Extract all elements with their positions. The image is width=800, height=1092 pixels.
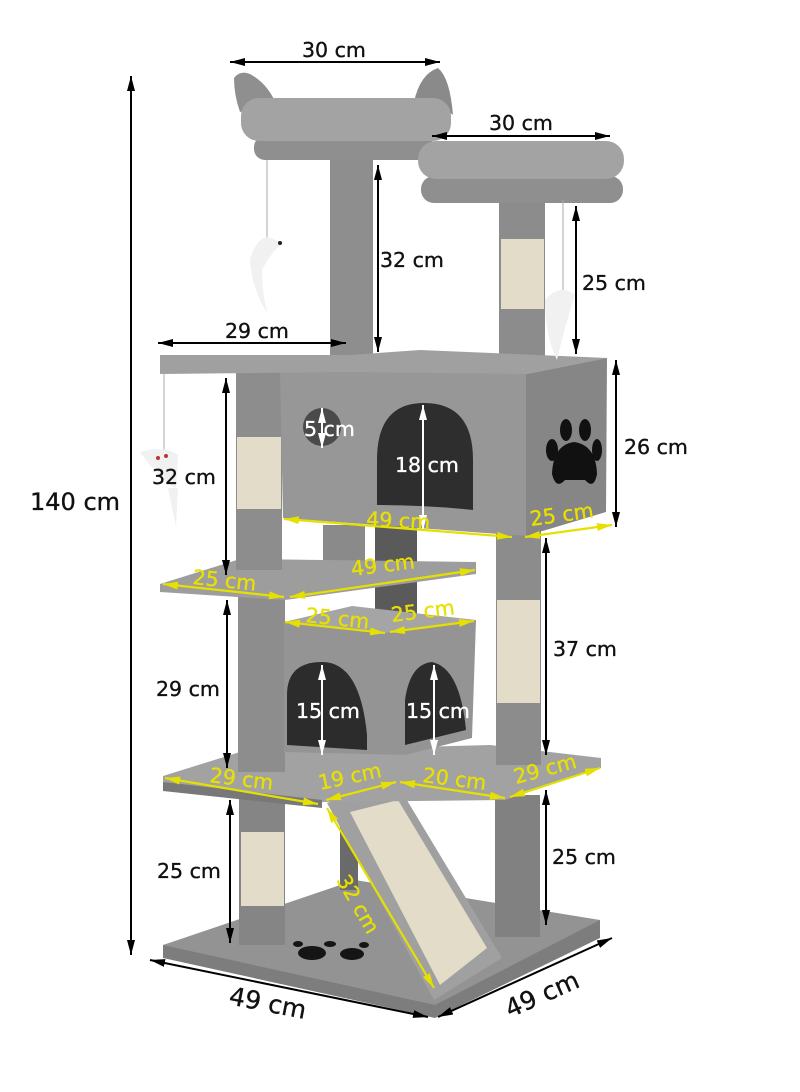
- black dimension labels: 29 cm: [156, 677, 220, 701]
- white dimension labels: 15 cm: [296, 699, 360, 723]
- yellow dimension labels: 29 cm: [511, 749, 579, 789]
- top right perch: [418, 141, 624, 203]
- mouse toys: [140, 160, 575, 527]
- paw icon: [546, 419, 602, 484]
- yellow dimension labels: 25 cm: [390, 595, 456, 627]
- white dimension labels: 5 cm: [304, 417, 355, 441]
- black dimension labels: 26 cm: [624, 435, 688, 459]
- lower platform: [163, 745, 601, 808]
- black dimension labels: 25 cm: [552, 845, 616, 869]
- top posts: [330, 155, 545, 360]
- lower posts: [239, 795, 540, 945]
- black dimension labels: 30 cm: [302, 38, 366, 62]
- black dimension arrows: [131, 62, 616, 1017]
- black dimension labels: 30 cm: [489, 111, 553, 135]
- ramp: [327, 782, 502, 1000]
- yellow dimension labels: 25 cm: [528, 498, 595, 531]
- yellow dimension arrows: [163, 519, 612, 988]
- black dimension labels: 32 cm: [380, 248, 444, 272]
- black dimension labels: 140 cm: [30, 488, 120, 516]
- base paw prints: [293, 941, 369, 960]
- yellow dimension labels: 19 cm: [316, 758, 383, 795]
- black dimension labels: 49 cm: [501, 965, 584, 1023]
- middle shelf: [160, 559, 476, 600]
- white dimension labels: [296, 417, 470, 723]
- yellow dimension labels: 49 cm: [350, 549, 416, 581]
- yellow dimension labels: 49 cm: [366, 507, 431, 534]
- yellow dimension labels: 32 cm: [332, 870, 384, 938]
- lower condo: [284, 606, 476, 755]
- black dimension labels: 29 cm: [225, 319, 289, 343]
- black dimension labels: 25 cm: [582, 271, 646, 295]
- top left perch: [234, 68, 453, 160]
- yellow dimension labels: 20 cm: [421, 763, 488, 795]
- white dimension arrows: [322, 405, 434, 755]
- black dimension labels: 37 cm: [553, 637, 617, 661]
- cat tree illustration: [140, 68, 624, 1018]
- black dimension labels: 25 cm: [157, 859, 221, 883]
- mid posts: [238, 525, 541, 772]
- base board: [163, 880, 600, 1018]
- black dimension labels: 49 cm: [227, 981, 309, 1025]
- yellow dimension labels: 25 cm: [304, 603, 370, 634]
- yellow dimension labels: 25 cm: [191, 565, 257, 596]
- white dimension labels: 18 cm: [395, 453, 459, 477]
- upper condo: [160, 350, 608, 536]
- white dimension labels: 15 cm: [406, 699, 470, 723]
- yellow dimension labels: 29 cm: [208, 763, 275, 795]
- yellow dimension labels: [191, 498, 595, 938]
- black dimension labels: 32 cm: [152, 465, 216, 489]
- upper posts: [236, 370, 282, 570]
- black dimension labels: [30, 38, 688, 1025]
